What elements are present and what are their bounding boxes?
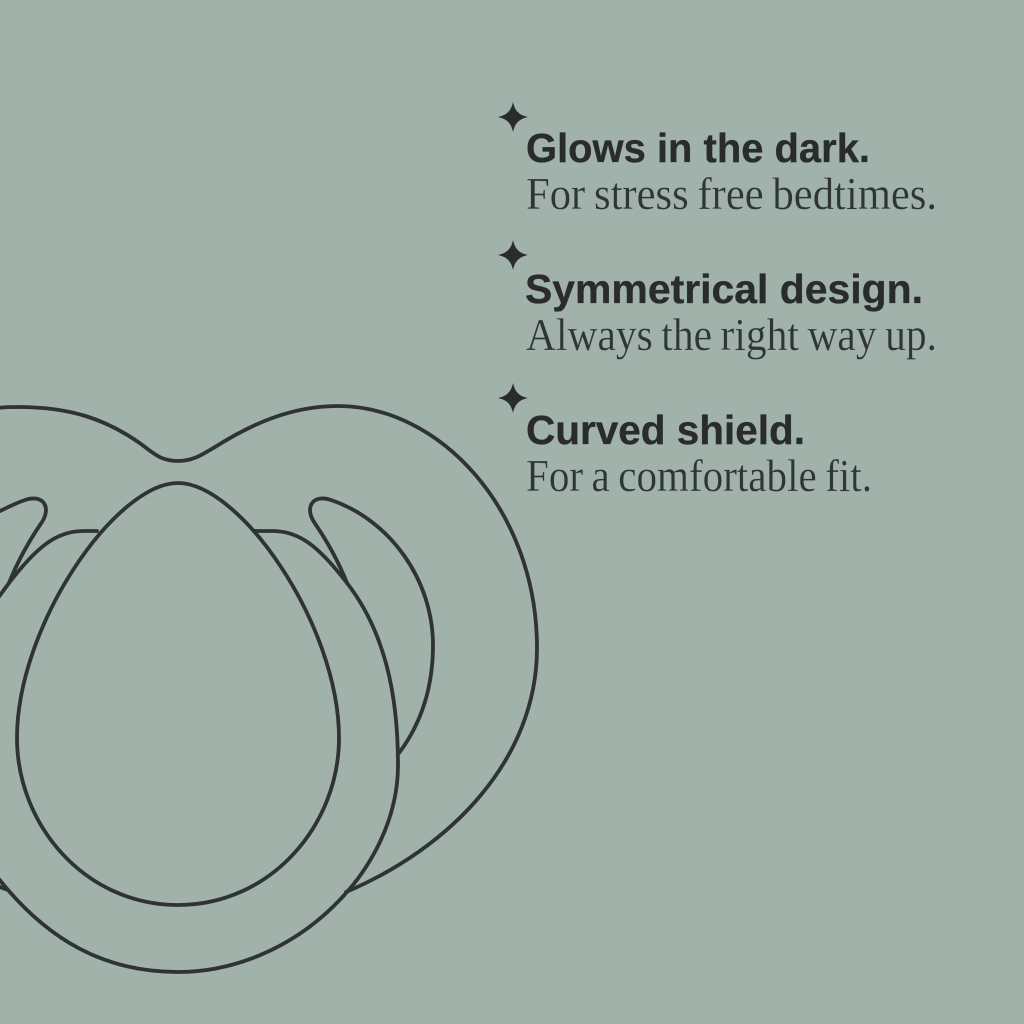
heading: Curved shield. — [526, 407, 805, 453]
icon: sparkle — [498, 240, 528, 270]
icon: sparkle — [498, 383, 528, 413]
left handle — [0, 498, 46, 583]
feature: glows in the dark — [498, 102, 937, 219]
feature: curved shield — [498, 383, 872, 501]
middle ring — [0, 531, 398, 972]
heading: Symmetrical design. — [525, 266, 923, 312]
feature: symmetrical design — [498, 240, 937, 360]
teat — [17, 483, 339, 905]
icon: sparkle — [498, 102, 528, 132]
illustration: pacifier outline — [0, 406, 537, 972]
outer shield lower-left fragment — [0, 886, 8, 890]
description: Always the right way up. — [526, 309, 937, 360]
description: For a comfortable fit. — [526, 450, 872, 501]
outer shield — [0, 406, 537, 892]
middle ring upper-left part — [0, 531, 97, 598]
description: For stress free bedtimes. — [526, 168, 937, 219]
right handle — [310, 498, 433, 753]
heading: Glows in the dark. — [526, 125, 870, 171]
